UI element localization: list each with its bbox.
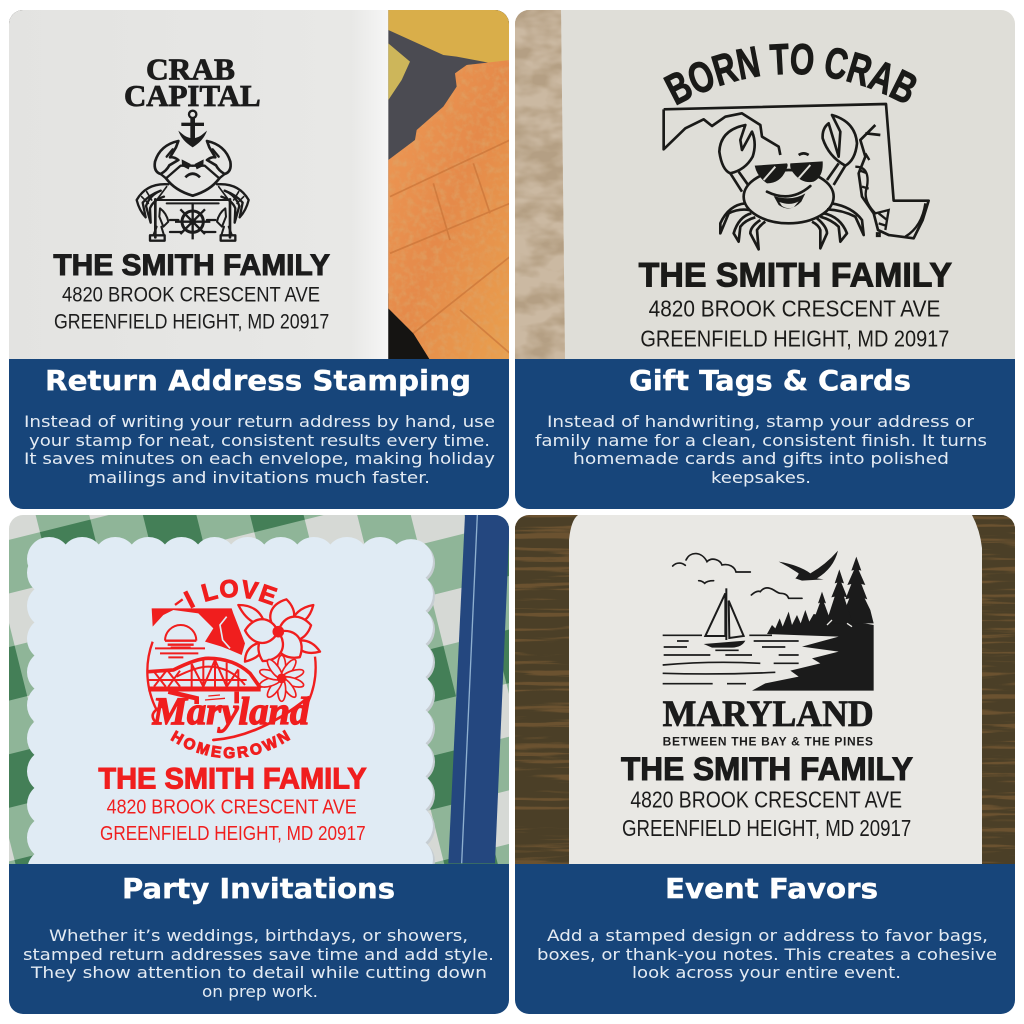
stamp impression: I love Maryland (98, 579, 367, 842)
address: GREENFIELD HEIGHT, MD 20917 (640, 326, 949, 352)
caption text: family name for a clean, consistent finish. It turns (535, 431, 987, 450)
heading: crab capital: CAPITAL (124, 79, 261, 113)
stamp impression: Maryland bay and pines (621, 551, 913, 841)
caption text: your stamp for neat, consistent results every time. (29, 431, 490, 450)
icon: sunset (155, 625, 205, 657)
address (100, 795, 366, 845)
stamp impression: crab capital (53, 52, 330, 333)
caption text (537, 926, 997, 982)
address: 4820 BROOK CRESCENT AVE (62, 283, 320, 307)
scalloped card shadow (51, 561, 413, 901)
arched heading (663, 43, 916, 106)
caption text: Whether it’s weddings, birthdays, or showers, (49, 926, 468, 945)
address: GREENFIELD HEIGHT, MD 20917 (54, 309, 329, 333)
caption text: homemade cards and gifts into polished (573, 449, 949, 468)
coaster card (569, 515, 982, 865)
icon: daisy (259, 655, 305, 701)
caption text: They show attention to detail while cutting down (30, 963, 487, 982)
icon: magnolia flower (238, 596, 320, 667)
bay coastline detail (855, 153, 925, 237)
panel: party invitations (9, 515, 509, 1014)
navy strip (448, 515, 510, 863)
address: GREENFIELD HEIGHT, MD 20917 (622, 815, 911, 841)
address (622, 787, 911, 841)
caption title: Event Favors (665, 872, 878, 905)
sandy texture strip (515, 10, 565, 360)
family name: THE SMITH FAMILY (53, 249, 330, 282)
arched text: homegrown: HOMEGROWN (170, 730, 291, 759)
map: Maryland (152, 608, 245, 655)
stamp impression: born to crab (638, 43, 952, 350)
caption text: keepsakes. (711, 468, 811, 487)
address: 4820 BROOK CRESCENT AVE (649, 296, 940, 322)
icon: seagull (779, 551, 838, 581)
icon: crab with sunglasses (719, 115, 864, 249)
caption block (515, 359, 1015, 509)
caption text: boxes, or thank-you notes. This creates a cohesive (537, 945, 997, 964)
caption text: stamped return addresses save time and add style. (23, 945, 494, 964)
panel: gift tags and cards (515, 10, 1015, 509)
caption text: on prep work. (202, 982, 318, 1001)
script wordmark: Maryland: Maryland (152, 689, 311, 733)
caption text (535, 412, 987, 487)
family name: THE SMITH FAMILY (639, 257, 952, 295)
caption text: Instead of handwriting, stamp your address or (547, 412, 974, 431)
panel: return address stamping (9, 10, 510, 509)
icon: pines and shoreline (752, 557, 874, 691)
heading: crab capital: CRAB (146, 52, 235, 86)
icon: bridge (148, 658, 261, 704)
caption block (9, 864, 509, 1014)
caption text (24, 412, 495, 487)
address (641, 300, 948, 350)
caption text (23, 926, 494, 1001)
address (54, 287, 328, 332)
icon: anchor (178, 111, 207, 147)
caption block (515, 864, 1015, 1014)
family name: THE SMITH FAMILY (621, 750, 913, 787)
scalloped card (49, 559, 411, 899)
caption title: Party Invitations (122, 872, 395, 905)
family name: THE SMITH FAMILY (98, 762, 367, 795)
icon: clouds (673, 554, 802, 598)
caption text: mailings and invitations much faster. (88, 468, 430, 487)
caption text: Instead of writing your return address by hand, use (24, 412, 495, 431)
card photo background (9, 10, 509, 24)
heading: crab capital (125, 59, 260, 107)
address: GREENFIELD HEIGHT, MD 20917 (100, 822, 366, 845)
icon: crab with ship wheel (137, 141, 249, 241)
address: 4820 BROOK CRESCENT AVE (630, 787, 902, 813)
autumn leaves photo (388, 10, 510, 360)
tagline: BETWEEN THE BAY & THE PINES (663, 735, 873, 749)
map outline: Maryland (664, 104, 929, 238)
icon: water lines (663, 635, 799, 684)
circle outline (147, 599, 316, 710)
wood background (515, 515, 1015, 865)
caption text: It saves minutes on each envelope, making holiday (24, 449, 495, 468)
gingham tablecloth (9, 515, 509, 865)
heading: Maryland: MARYLAND (663, 694, 874, 735)
paper sheet (9, 10, 389, 360)
panel: event favors (515, 515, 1015, 1014)
caption text: look across your entire event. (632, 963, 901, 982)
address: 4820 BROOK CRESCENT AVE (107, 795, 357, 818)
icon: sailboat (704, 588, 745, 648)
arched heading: BORN TO CRAB (663, 43, 916, 106)
caption title: Gift Tags & Cards (629, 364, 911, 397)
arched heading: I love: I LOVE (183, 579, 278, 608)
caption text: Add a stamped design or address to favor bags, (547, 926, 988, 945)
caption title: Return Address Stamping (45, 364, 471, 397)
caption block (9, 359, 509, 509)
paper card background (515, 10, 1015, 360)
